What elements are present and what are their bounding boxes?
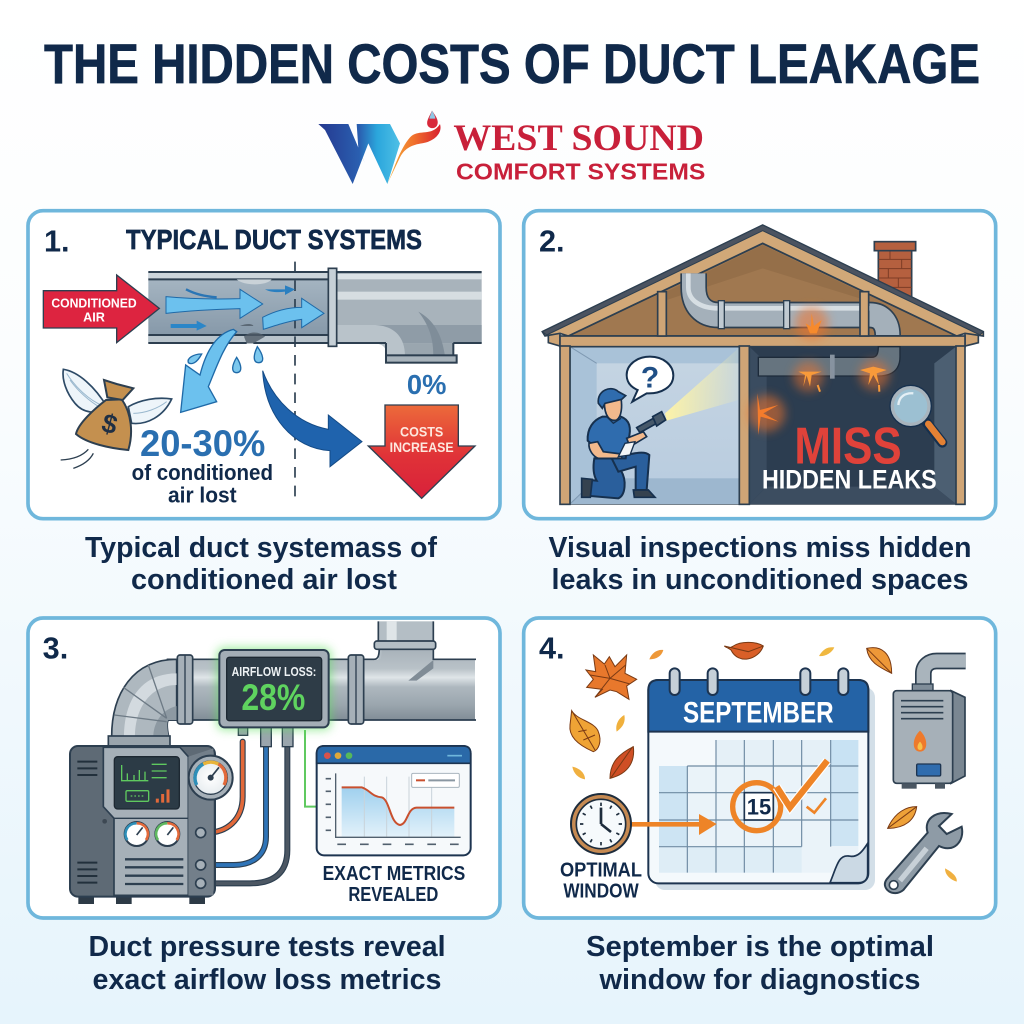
machine screen xyxy=(114,757,179,809)
icon: furnace xyxy=(893,661,966,789)
arrow: leak increases costs xyxy=(263,371,362,467)
caption 3: exact airflow loss metrics xyxy=(92,964,442,996)
logo text: Comfort Systems: COMFORT SYSTEMS xyxy=(456,158,705,184)
flashlight beam xyxy=(665,348,738,421)
leak droplets xyxy=(188,347,263,373)
caption 3: Duct pressure tests reveal xyxy=(88,931,446,963)
caption 1: conditioned air lost xyxy=(131,564,397,596)
panel 1: typical duct systems xyxy=(28,211,500,519)
panel frame xyxy=(28,618,500,918)
hoses xyxy=(207,730,317,883)
arrow: conditioned air xyxy=(43,275,159,343)
caption 1: Typical duct systemass of xyxy=(85,532,437,564)
caption 3 xyxy=(88,931,446,996)
step number 4: 4. xyxy=(539,632,565,666)
icon: money bag with wings: $ xyxy=(99,408,121,440)
airflow arrows in duct xyxy=(166,285,324,331)
front leg and boot xyxy=(612,453,655,497)
step number 3: 3. xyxy=(43,632,68,666)
calendar rings xyxy=(670,668,848,695)
duct with leak xyxy=(148,268,482,363)
caption 2: leaks in unconditioned spaces xyxy=(552,564,968,596)
panel 2: visual inspections xyxy=(524,211,996,519)
airflow loss display: AIRFLOW LOSS: xyxy=(232,665,316,679)
arrow: costs increase: INCREASE xyxy=(390,439,454,455)
arrow: conditioned air: CONDITIONED xyxy=(51,296,137,310)
arrow: costs increase: COSTS xyxy=(400,424,443,440)
roof xyxy=(548,333,978,346)
icon: technician with flashlight xyxy=(582,389,666,498)
stat label xyxy=(132,460,273,508)
label: optimal window xyxy=(560,859,642,902)
label: hidden leaks: HIDDEN LEAKS xyxy=(762,464,937,494)
icon: wrench xyxy=(885,813,962,893)
label: MISS: MISS xyxy=(794,417,902,475)
panel frame xyxy=(28,211,500,519)
calendar xyxy=(648,668,875,890)
caption 1 xyxy=(85,532,437,596)
arrow: leaked air xyxy=(181,329,237,412)
marked date 15 xyxy=(733,783,781,831)
stat label: air lost xyxy=(168,483,237,508)
lower duct in dark room xyxy=(758,347,900,379)
attic xyxy=(568,243,957,336)
step number 2: 2. xyxy=(539,225,565,259)
icon: clock xyxy=(571,794,631,854)
torso xyxy=(588,417,630,458)
logo: West Sound Comfort Systems xyxy=(318,111,705,184)
test machine xyxy=(70,746,233,904)
airflow loss display: 28% xyxy=(241,676,305,718)
panel frame xyxy=(524,211,996,519)
panel heading: TYPICAL DUCT SYSTEMS xyxy=(126,224,422,255)
label: exact metrics revealed: REVEALED xyxy=(348,883,438,906)
right room xyxy=(749,347,956,504)
speech bubble with question mark: ? xyxy=(641,361,659,394)
calendar: SEPTEMBER xyxy=(683,697,834,730)
metrics chart window xyxy=(317,746,471,855)
attic duct xyxy=(688,273,888,336)
autumn leaves xyxy=(570,642,957,882)
label: exact metrics revealed: EXACT METRICS xyxy=(323,862,465,885)
panel 4: September window xyxy=(524,618,996,918)
logo mark: W with flame xyxy=(318,111,441,184)
logo text: West Sound: WEST SOUND xyxy=(453,118,704,159)
main duct xyxy=(108,621,476,747)
caption 4 xyxy=(586,931,934,996)
area line chart xyxy=(326,773,461,844)
icon: money bag with wings xyxy=(61,369,172,468)
marked date 15: 15 xyxy=(747,794,771,819)
airflow loss display xyxy=(217,647,331,730)
caption 2: Visual inspections miss hidden xyxy=(548,532,972,564)
back leg and foot xyxy=(582,458,625,498)
label: optimal window: OPTIMAL xyxy=(560,859,642,882)
step number 1: 1. xyxy=(44,225,70,259)
panel frame xyxy=(524,618,996,918)
small gauges xyxy=(125,822,179,846)
leak glows xyxy=(748,307,889,435)
stat label: of conditioned xyxy=(132,460,273,485)
icon: magnifying glass xyxy=(890,385,942,443)
caption 4: window for diagnostics xyxy=(599,964,920,996)
house cutaway xyxy=(542,225,983,504)
label: exact metrics revealed xyxy=(323,862,465,906)
caption 2 xyxy=(548,532,972,596)
hose ports xyxy=(196,828,206,888)
chimney xyxy=(874,242,916,300)
calendar grid xyxy=(659,740,858,873)
caption 4: September is the optimal xyxy=(586,931,934,963)
arrow: conditioned air: AIR xyxy=(83,310,105,324)
speech bubble with question mark xyxy=(627,357,673,402)
left room xyxy=(570,347,739,504)
stat: 0%: 0% xyxy=(407,369,446,400)
elbow xyxy=(112,659,177,737)
dashed divider xyxy=(292,262,297,503)
label: optimal window: WINDOW xyxy=(563,879,639,902)
panel 3: duct pressure test xyxy=(28,618,500,918)
check marks xyxy=(777,761,827,813)
stat: 20-30%: 20-30% xyxy=(140,422,265,464)
arrow: costs increase xyxy=(368,405,475,498)
arrow from clock to date xyxy=(632,814,717,835)
page curl xyxy=(830,843,868,883)
large gauge xyxy=(189,756,233,800)
hose connectors xyxy=(238,727,293,747)
frame beams xyxy=(560,336,965,347)
